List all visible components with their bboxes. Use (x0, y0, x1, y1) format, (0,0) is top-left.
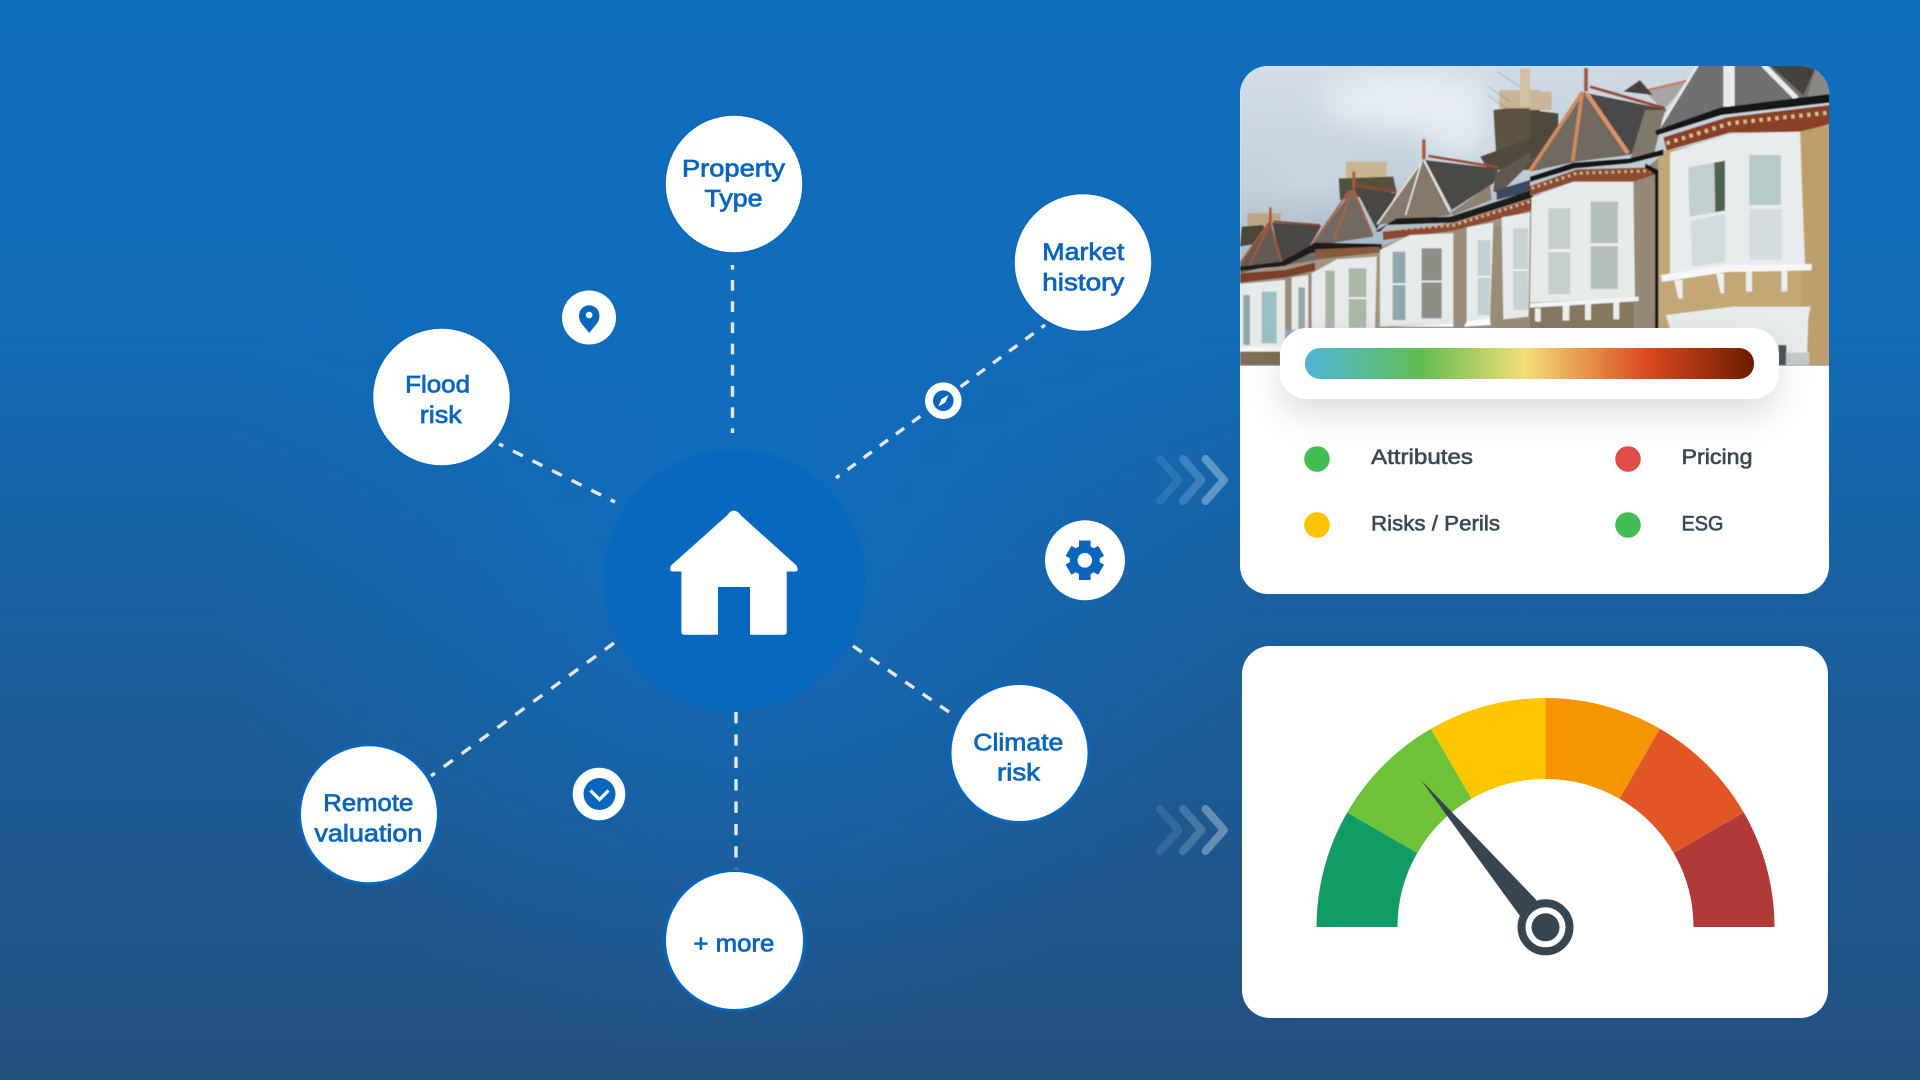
right houses (1530, 65, 1830, 365)
node: property type: Property (682, 156, 786, 182)
gauge needle (1421, 780, 1570, 951)
icon: house (670, 510, 798, 635)
legend item: esg (1615, 512, 1724, 538)
legend item: attributes (1304, 445, 1473, 472)
sky and left houses (1240, 68, 1540, 365)
dashed connector: market history (836, 325, 1045, 478)
drainpipe (1645, 163, 1658, 328)
legend item: pricing: Pricing (1682, 445, 1752, 469)
node: climate risk: risk (997, 760, 1041, 786)
node: flood risk: risk (420, 402, 463, 429)
dashed connector: climate risk (853, 646, 949, 712)
panel: gauge card (1242, 646, 1828, 1018)
house D side windows (1467, 223, 1493, 323)
icon: location pin (562, 290, 616, 344)
eaves E (1655, 94, 1830, 135)
icon: chevron down (572, 767, 626, 821)
dashed connector: more (734, 712, 738, 872)
node: remote valuation: Remote (323, 790, 413, 817)
gradient risk bar (1305, 348, 1754, 379)
legend item: esg: ESG (1682, 512, 1724, 536)
node: market history: Market (1042, 239, 1124, 266)
lower bay E (1666, 307, 1811, 365)
brick bands (1240, 263, 1315, 283)
legend item: risks / perils (1304, 512, 1500, 538)
walls (1240, 193, 1540, 330)
node: climate risk: Climate (973, 730, 1063, 756)
node: more: + more (693, 930, 774, 958)
node: remote valuation (300, 745, 438, 884)
dashed connector: remote valuation (431, 643, 614, 776)
colour scale pill (1280, 328, 1779, 399)
node: property type (665, 115, 803, 253)
bay B (1312, 257, 1377, 328)
node: market history: history (1042, 270, 1125, 296)
wall D (1633, 157, 1660, 328)
node: market history (1014, 194, 1152, 332)
photo: terraced houses (1240, 65, 1830, 366)
bay A (1240, 280, 1285, 348)
node: flood risk (372, 328, 510, 466)
bay E (1670, 132, 1805, 274)
bay D (1530, 182, 1635, 303)
node: property type: Type (704, 186, 762, 212)
central house hub (603, 449, 865, 711)
bay C (1380, 233, 1453, 327)
dashed connector: flood risk (499, 444, 615, 502)
node: flood risk: Flood (405, 372, 470, 398)
legend (1304, 445, 1752, 538)
hub and spoke diagram (300, 115, 1152, 1010)
legend item: attributes: Attributes (1371, 445, 1473, 469)
gauge dial (1316, 698, 1774, 927)
house E roof (1658, 65, 1830, 129)
node: more (664, 870, 804, 1010)
roofs (1240, 220, 1283, 273)
panel: property data card (1240, 65, 1830, 594)
wall E (1658, 130, 1802, 328)
arrow: chevrons to gauge card (1160, 809, 1224, 851)
arrow: chevrons to data card (1160, 459, 1224, 501)
legend item: risks / perils: Risks / Perils (1371, 512, 1500, 536)
legend item: pricing (1615, 445, 1752, 472)
icon: settings gear (1045, 520, 1125, 600)
eaves (1240, 243, 1382, 271)
dashed connector: property type (731, 265, 734, 433)
house D roof (1530, 92, 1630, 172)
node: climate risk (950, 684, 1089, 822)
eaves D (1530, 149, 1663, 182)
node: remote valuation: valuation (314, 820, 422, 848)
left chimneys (1247, 213, 1281, 226)
icon: compass (925, 382, 962, 419)
